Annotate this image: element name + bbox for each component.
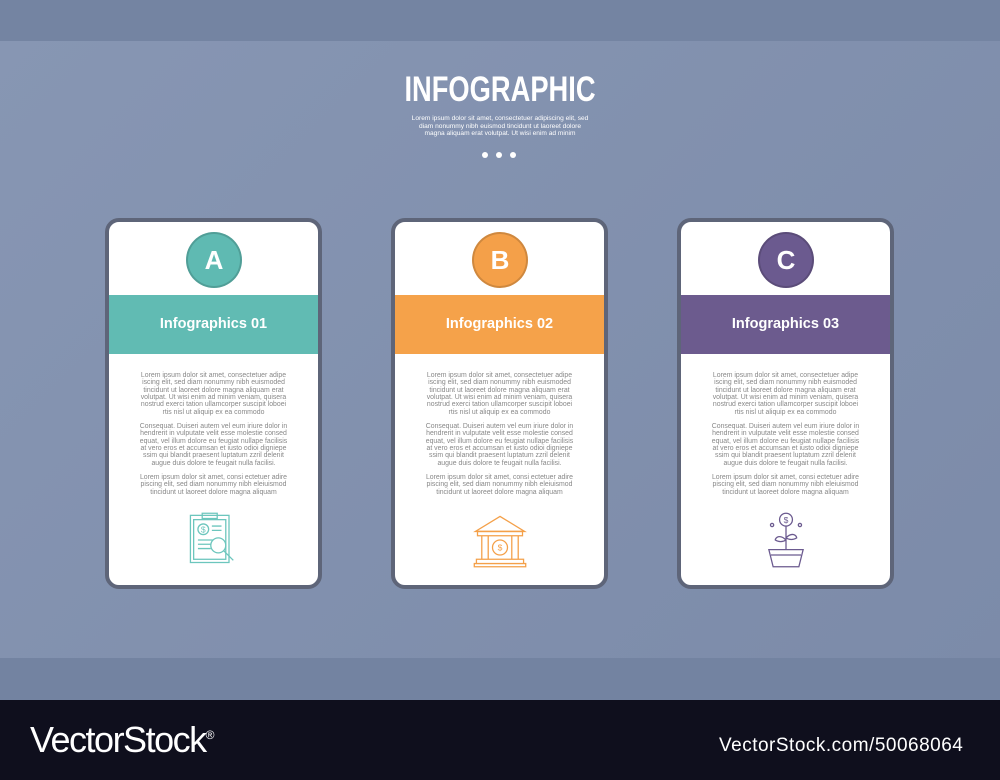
text C: piscing elit, sed diam nonummy nibh eleiuismod (713, 481, 858, 488)
heading C (681, 295, 890, 354)
text A: nostrud exerci tation ullamcorper suscipit loboei (141, 401, 286, 408)
text B: Lorem ipsum dolor sit amet, consi ectetuer adire (426, 474, 573, 481)
text A: Lorem ipsum dolor sit amet, consi ectetuer adire (140, 474, 287, 481)
text B: at vero eros et accumsan et iusto odioi digniepe (427, 445, 572, 452)
logo text: VectorStock® (30, 719, 213, 760)
text C: augue duis dolore te feugait nulla facilisi. (723, 460, 848, 467)
text A: volutpat. Ut wisi enim ad minim veniam, quisera (141, 394, 286, 401)
text C: volutpat. Ut wisi enim ad minim veniam, quisera (713, 394, 858, 401)
circle C: C (777, 245, 795, 275)
text B: equat, vel illum dolore eu feugiat nullape facilisis (426, 438, 573, 445)
text B: Lorem ipsum dolor sit amet, consectetuer adipe (427, 372, 572, 379)
text A: Lorem ipsum dolor sit amet, consectetuer adipe (141, 372, 286, 379)
text C: tincidunt ut laoreet dolore magna aliquam (722, 489, 849, 496)
text C: ssim qui blandit praesent luptatum zzril delenit (715, 452, 856, 459)
icon: bank (473, 516, 527, 568)
circle B (472, 232, 528, 288)
subtitle: diam nonummy nibh euismod tincidunt ut laoreet dolore (419, 123, 581, 130)
text B: Consequat. Duiseri autem vel eum iriure dolor in (426, 423, 573, 430)
text A: at vero eros et accumsan et iusto odioi digniepe (141, 445, 286, 452)
icon: bank: $ (498, 543, 503, 553)
text A: tincidunt ut laoreet dolore magna aliquam erat (143, 387, 284, 394)
heading B: Infographics 02 (446, 316, 553, 332)
text C (712, 372, 859, 496)
main background (0, 41, 1000, 658)
panel: C (677, 218, 894, 589)
text B: hendrerit in vulputate velit esse molestie consed (426, 430, 573, 437)
text B: iscing elit, sed diam nonummy nibh euismoded (428, 379, 571, 386)
text A: equat, vel illum dolore eu feugiat nullape facilisis (140, 438, 287, 445)
text C: Consequat. Duiseri autem vel eum iriure dolor in (712, 423, 859, 430)
title: INFOGRAPHIC (404, 70, 596, 109)
text A: ssim qui blandit praesent luptatum zzril delenit (143, 452, 284, 459)
circle A (186, 232, 242, 288)
text C: Lorem ipsum dolor sit amet, consectetuer adipe (713, 372, 858, 379)
text C: at vero eros et accumsan et iusto odioi digniepe (713, 445, 858, 452)
text A: piscing elit, sed diam nonummy nibh eleiuismod (141, 481, 286, 488)
bottom band (0, 658, 1000, 700)
subtitle (412, 115, 588, 137)
icon: money plant (768, 512, 804, 568)
panel: A (105, 218, 322, 589)
text B: volutpat. Ut wisi enim ad minim veniam, quisera (427, 394, 572, 401)
text B: tincidunt ut laoreet dolore magna aliquam erat (429, 387, 570, 394)
text A (140, 372, 287, 496)
circle B: B (491, 245, 509, 275)
subtitle: magna aliquam erat volutpat. Ut wisi enim ad minim (424, 130, 576, 137)
heading C: Infographics 03 (732, 316, 839, 332)
text C: iscing elit, sed diam nonummy nibh euismoded (714, 379, 857, 386)
text A: hendrerit in vulputate velit esse molestie consed (140, 430, 287, 437)
text A: rtis nisl ut aliquip ex ea commodo (163, 409, 264, 416)
text B: rtis nisl ut aliquip ex ea commodo (449, 409, 550, 416)
text C: tincidunt ut laoreet dolore magna aliquam erat (715, 387, 856, 394)
text C: hendrerit in vulputate velit esse molestie consed (712, 430, 859, 437)
text C: equat, vel illum dolore eu feugiat nullape facilisis (712, 438, 859, 445)
circle A: A (205, 245, 223, 275)
id text: VectorStock.com/50068064 (719, 735, 963, 756)
text C: Lorem ipsum dolor sit amet, consi ectetuer adire (712, 474, 859, 481)
subtitle: Lorem ipsum dolor sit amet, consectetuer adipiscing elit, sed (412, 115, 588, 122)
text A: iscing elit, sed diam nonummy nibh euismoded (142, 379, 285, 386)
text B: augue duis dolore te feugait nulla facilisi. (437, 460, 562, 467)
text B: nostrud exerci tation ullamcorper suscipit loboei (427, 401, 572, 408)
text A: tincidunt ut laoreet dolore magna aliquam (150, 489, 277, 496)
heading B (395, 295, 604, 354)
text C: rtis nisl ut aliquip ex ea commodo (735, 409, 836, 416)
text A: augue duis dolore te feugait nulla facilisi. (151, 460, 276, 467)
text B: tincidunt ut laoreet dolore magna aliquam (436, 489, 563, 496)
heading A (109, 295, 318, 354)
dots (482, 152, 516, 158)
text B (426, 372, 573, 496)
panel: B (391, 218, 608, 589)
top band (0, 0, 1000, 41)
text C: nostrud exerci tation ullamcorper suscipit loboei (713, 401, 858, 408)
circle C (758, 232, 814, 288)
heading A: Infographics 01 (160, 316, 267, 332)
text B: piscing elit, sed diam nonummy nibh eleiuismod (427, 481, 572, 488)
text B: ssim qui blandit praesent luptatum zzril delenit (429, 452, 570, 459)
footer (0, 700, 1000, 780)
icon: clipboard with magnifier: $ (201, 525, 206, 535)
icon: clipboard with magnifier (190, 512, 234, 564)
text A: Consequat. Duiseri autem vel eum iriure dolor in (140, 423, 287, 430)
icon: money plant: $ (784, 515, 789, 525)
